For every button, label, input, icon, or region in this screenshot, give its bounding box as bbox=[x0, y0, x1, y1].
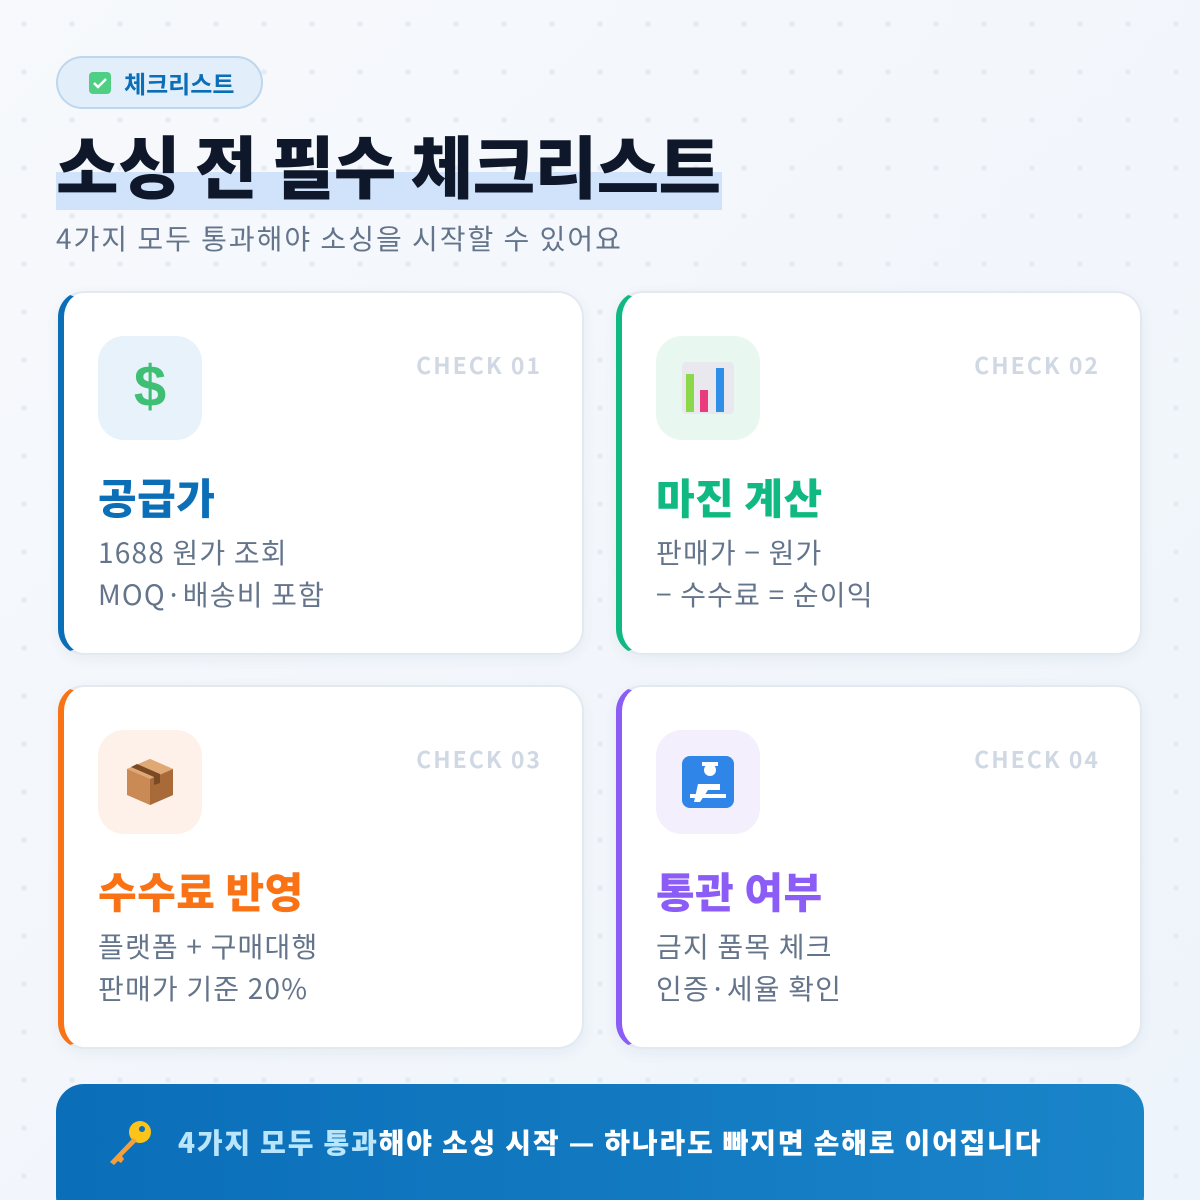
description: 플랫폼 + 구매대행 bbox=[98, 926, 318, 966]
description bbox=[656, 532, 874, 614]
title highlight bbox=[56, 172, 722, 210]
panel: check 01 bbox=[58, 291, 584, 655]
description: 판매가 기준 20% bbox=[98, 968, 308, 1008]
icon: bar chart bbox=[656, 336, 760, 440]
description bbox=[98, 926, 318, 1008]
callout banner bbox=[56, 1084, 1144, 1200]
heading: 수수료 반영 bbox=[98, 860, 304, 921]
description: 금지 품목 체크 bbox=[656, 926, 833, 966]
description: 판매가 − 원가 bbox=[656, 532, 822, 572]
icon: check box bbox=[89, 72, 111, 94]
label: CHECK 01 bbox=[416, 347, 542, 381]
icon: key bbox=[110, 1121, 151, 1165]
badge: 체크리스트 bbox=[124, 65, 234, 100]
description: − 수수료 = 순이익 bbox=[656, 574, 874, 614]
label: CHECK 03 bbox=[416, 741, 542, 775]
heading: 공급가 bbox=[98, 466, 215, 527]
panel: check 04 bbox=[616, 685, 1142, 1049]
description: 인증·세율 확인 bbox=[656, 968, 842, 1008]
label: CHECK 04 bbox=[974, 741, 1100, 775]
badge bbox=[56, 56, 263, 109]
icon: dollar bbox=[98, 336, 202, 440]
description: 1688 원가 조회 bbox=[98, 532, 288, 572]
subtitle: 4가지 모두 통과해야 소싱을 시작할 수 있어요 bbox=[56, 218, 623, 258]
title: 소싱 전 필수 체크리스트 bbox=[56, 114, 721, 213]
label: CHECK 02 bbox=[974, 347, 1100, 381]
banner text: 4가지 모두 통과해야 소싱 시작 — 하나라도 빠지면 손해로 이어집니다 bbox=[178, 1122, 1042, 1162]
icon: customs bbox=[656, 730, 760, 834]
heading: 통관 여부 bbox=[656, 860, 823, 921]
icon: box bbox=[98, 730, 202, 834]
heading: 마진 계산 bbox=[656, 466, 823, 527]
description: MOQ·배송비 포함 bbox=[98, 574, 325, 614]
description bbox=[656, 926, 842, 1008]
panel: check 02 bbox=[616, 291, 1142, 655]
panel: check 03 bbox=[58, 685, 584, 1049]
description bbox=[98, 532, 325, 614]
